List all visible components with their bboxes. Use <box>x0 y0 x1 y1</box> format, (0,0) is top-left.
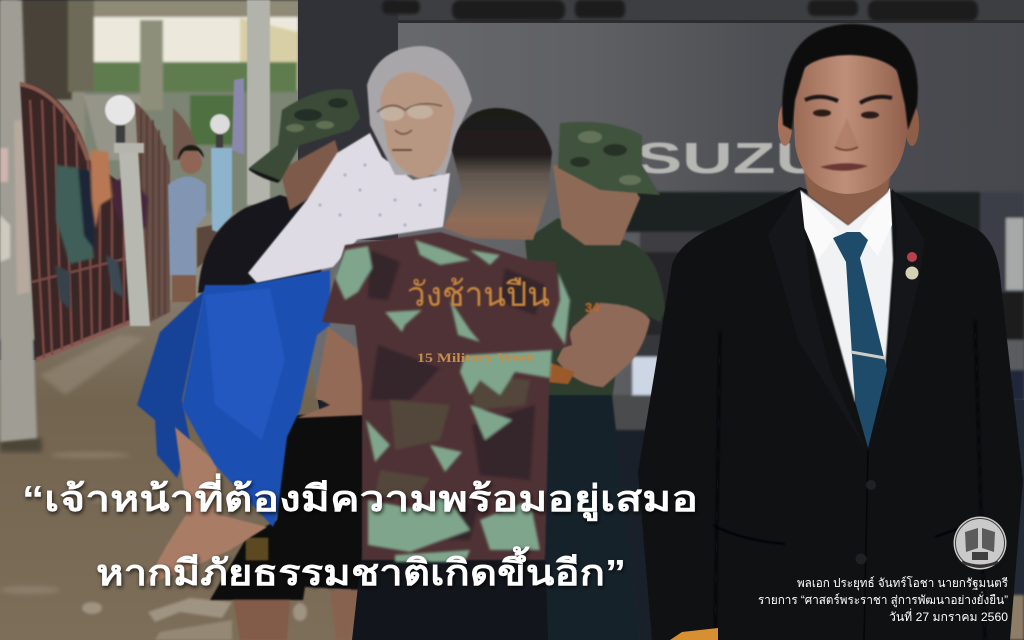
soldier in green shirt on right <box>525 122 665 640</box>
truck behind the group <box>298 0 1024 640</box>
group of rescue soldiers carrying elderly woman <box>137 46 665 640</box>
elderly woman in polka dot top <box>248 46 472 283</box>
white shirt <box>800 190 893 402</box>
soldier on left in black <box>198 89 360 293</box>
shirt text: unit name: วังช้านปืน <box>407 277 550 314</box>
left concrete pillar with posters <box>0 0 37 442</box>
lamp posts <box>105 0 270 326</box>
building, sky and trees behind the fence <box>0 0 300 340</box>
blue cloth lobe behind legs <box>137 290 205 478</box>
ISUZU logo on truck: ISUZU <box>616 134 826 183</box>
portrait of Prime Minister in dark suit <box>638 24 1023 640</box>
lapel pins <box>907 252 917 262</box>
caption: speaker and programme: รายการ “ศาสตร์พระราชา สู่การพัฒนาอย่างยั่งยืน” <box>758 591 1008 608</box>
soldier's lower legs and black shorts <box>210 415 365 640</box>
hanging laundry <box>55 150 148 310</box>
government seal <box>954 516 1006 570</box>
tie clip <box>851 352 885 358</box>
jacket buttons <box>866 480 876 490</box>
camouflage patches <box>335 240 570 562</box>
sleeve seams and pocket <box>715 320 985 640</box>
suit jacket <box>638 187 1023 640</box>
caption: speaker and programme <box>758 576 1009 624</box>
blue cloth over elderly woman <box>182 270 330 527</box>
camouflage shirt <box>322 232 572 560</box>
facial features <box>805 97 892 171</box>
headline quote: หากมีภัยธรรมชาติเกิดขึ้นอีก” <box>96 546 626 593</box>
headline quote <box>22 473 698 593</box>
caption: speaker and programme: พลเอก ประยุทธ์ จันทร์โอชา นายกรัฐมนตรี <box>797 576 1009 591</box>
neck and head <box>802 150 893 225</box>
bare legs and feet of elderly woman <box>145 427 267 584</box>
hair <box>782 24 918 130</box>
soldier in green shirt on right: 34 <box>585 300 600 315</box>
soldier in camouflage shirt with back turned: 15 Military Week <box>417 350 536 365</box>
flood water <box>0 300 360 640</box>
arms of camouflage soldier <box>297 327 372 418</box>
necktie <box>833 232 887 448</box>
shaved head of camouflage soldier <box>443 108 552 240</box>
caption: speaker and programme: วันที่ 27 มกราคม 2560 <box>889 608 1008 624</box>
fence <box>20 82 218 362</box>
dark trousers <box>352 550 548 640</box>
headline quote: “เจ้าหน้าที่ต้องมีความพร้อมอยู่เสมอ <box>22 473 698 522</box>
jacket lapels <box>768 187 866 450</box>
soldier in camouflage shirt with back turned <box>297 108 572 640</box>
shirt collar <box>858 188 892 256</box>
woman standing in background <box>168 145 206 302</box>
orange wristband <box>670 628 718 640</box>
